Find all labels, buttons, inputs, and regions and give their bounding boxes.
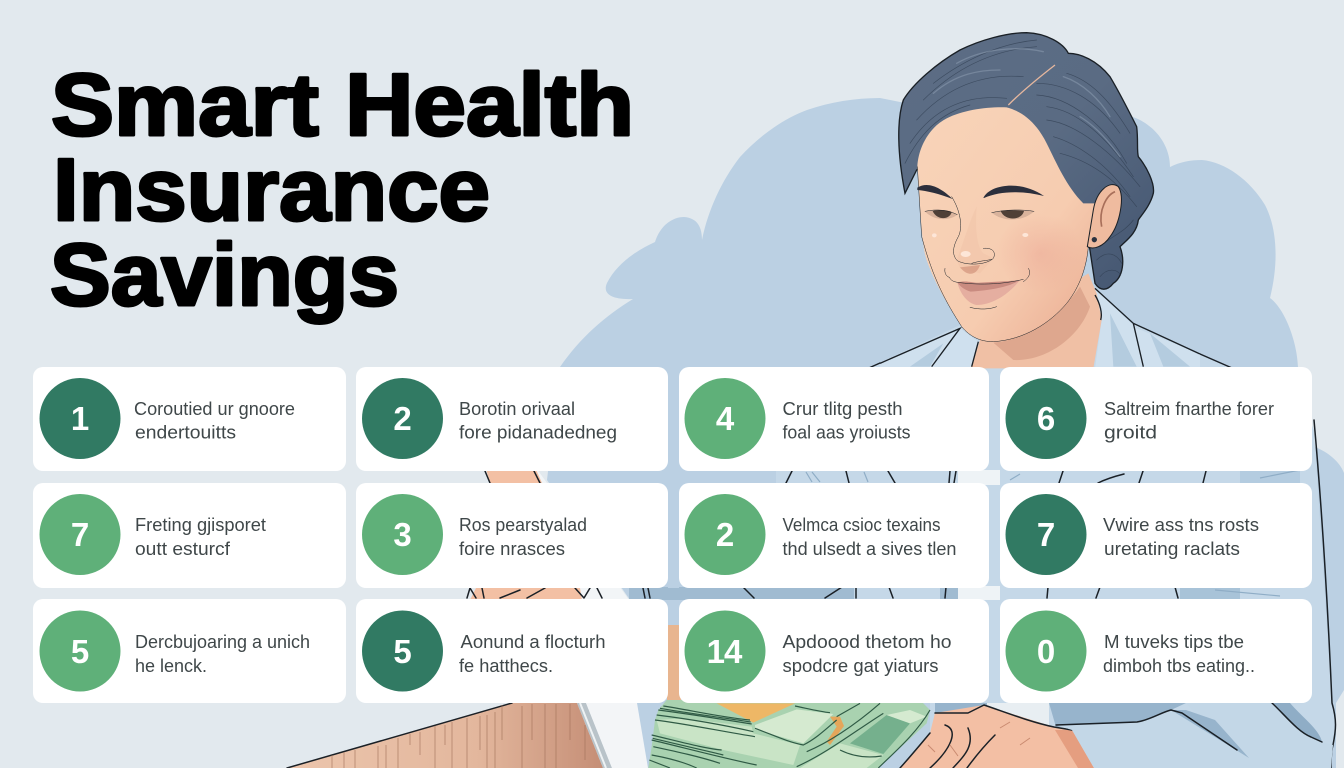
- card 8: row 2 column 4: [1000, 483, 1312, 588]
- badge 5: [362, 610, 443, 692]
- card 1 text: Coroutied ur gnoore: [134, 399, 295, 419]
- card 11 text: [782, 632, 952, 676]
- badge 5: [40, 610, 120, 692]
- card 6: row 2 column 2: [356, 483, 668, 588]
- card 3 text: foal aas yroiusts: [782, 422, 910, 442]
- badge 6: [1006, 378, 1086, 459]
- card 7 text: [782, 515, 956, 559]
- badge 7: 7: [71, 516, 89, 553]
- card 3 text: Crur tlitg pesth: [782, 399, 902, 419]
- collar lines: [880, 288, 1200, 367]
- card 4 text: [1104, 399, 1274, 442]
- card 1 text: endertouitts: [135, 422, 236, 442]
- card 10 text: Aonund a flocturh: [460, 632, 606, 652]
- badge 7: [40, 494, 120, 575]
- neck: [971, 273, 1102, 368]
- badge 0: 0: [1037, 633, 1055, 670]
- card 9 text: [135, 632, 310, 676]
- card 12: row 3 column 4: [1000, 599, 1312, 703]
- card 4 text: groitd: [1104, 422, 1157, 442]
- card 7 text: thd ulsedt a sives tlen: [782, 539, 956, 559]
- lower hand: [900, 705, 1094, 768]
- card 11 text: spodcre gat yiaturs: [782, 656, 938, 676]
- badge 3: [362, 494, 443, 575]
- badge 6: 6: [1037, 400, 1055, 437]
- card 5 text: Freting gjisporet: [135, 515, 266, 535]
- card 9 text: he lenck.: [135, 656, 207, 676]
- chin shadow: [993, 287, 1090, 360]
- card 6 text: Ros pearstyalad: [459, 515, 587, 535]
- badge 0: [1006, 610, 1086, 692]
- badge 5: 5: [71, 633, 89, 670]
- badge 5: 5: [393, 633, 412, 670]
- eyebrows: [917, 185, 1044, 199]
- raised hand: [467, 465, 629, 600]
- card 1: row 1 column 1: [33, 367, 346, 471]
- title: Savings: [50, 225, 399, 324]
- collar: [880, 288, 1200, 368]
- card 12 text: dimboh tbs eating..: [1103, 656, 1255, 676]
- card 10 text: fe hatthecs.: [459, 656, 553, 676]
- card 8 text: Vwire ass tns rosts: [1103, 515, 1259, 535]
- badge 3: 3: [393, 516, 412, 553]
- card 2 text: [459, 399, 617, 442]
- card 4 text: Saltreim fnarthe forer: [1104, 399, 1274, 419]
- eyes: [925, 210, 1034, 220]
- card 11 text: Apdoood thetom ho: [782, 632, 952, 652]
- nose: [932, 197, 1028, 274]
- card 10 text: [459, 632, 606, 676]
- card 3: row 1 column 3: [679, 367, 989, 471]
- card 10: row 3 column 2: [356, 599, 668, 703]
- badge 7: [1006, 494, 1086, 575]
- card 3 text: [782, 399, 910, 442]
- card 1 text: [134, 399, 295, 442]
- title: Insurance: [53, 140, 490, 239]
- title: Smart Health: [51, 55, 634, 154]
- badge 1: [40, 378, 120, 459]
- illustration: woman holding money: [287, 33, 1336, 768]
- card 7 text: Velmca csioc texains: [782, 515, 940, 535]
- card 5 text: [135, 515, 266, 559]
- badge 4: 4: [716, 400, 735, 437]
- badge 2: 2: [393, 400, 412, 437]
- wooden table: [287, 625, 681, 768]
- card 4: row 1 column 4: [1000, 367, 1312, 471]
- badge 4: [684, 378, 766, 459]
- card 7: row 2 column 3: [679, 483, 989, 588]
- card 5: row 2 column 1: [33, 483, 346, 588]
- badge 14: [684, 610, 766, 692]
- stack of money: [648, 700, 930, 768]
- card 9 text: Dercbujoaring a unich: [135, 632, 310, 652]
- card 6 text: foire nrasces: [459, 539, 565, 559]
- badge 2: [684, 494, 766, 575]
- card 6 text: [459, 515, 587, 559]
- body and shirt: [629, 323, 1336, 768]
- smile: [945, 268, 1030, 309]
- card 12 text: [1103, 632, 1255, 676]
- card 8 text: [1103, 515, 1259, 559]
- card 5 text: outt esturcf: [135, 539, 231, 559]
- badge 7: 7: [1037, 516, 1055, 553]
- card 2: row 1 column 2: [356, 367, 668, 471]
- badge 2: 2: [716, 516, 734, 553]
- hair: [899, 33, 1154, 289]
- title: [50, 55, 634, 324]
- badge 14: 14: [707, 633, 743, 670]
- face: [917, 107, 1097, 342]
- card 2 text: Borotin orivaal: [459, 399, 575, 419]
- ear: [1087, 185, 1121, 248]
- badge 1: 1: [71, 400, 89, 437]
- cheek blush: [997, 213, 1083, 293]
- portrait: [880, 33, 1200, 368]
- card 2 text: fore pidanadedneg: [459, 422, 617, 442]
- background cloud shape: [547, 98, 1344, 768]
- card 11: row 3 column 3: [679, 599, 989, 703]
- card 8 text: uretating raclats: [1104, 539, 1240, 559]
- badge 2: [362, 378, 443, 459]
- card 12 text: M tuveks tips tbe: [1104, 632, 1244, 652]
- card 9: row 3 column 1: [33, 599, 346, 703]
- shirt cuff: [1056, 703, 1333, 768]
